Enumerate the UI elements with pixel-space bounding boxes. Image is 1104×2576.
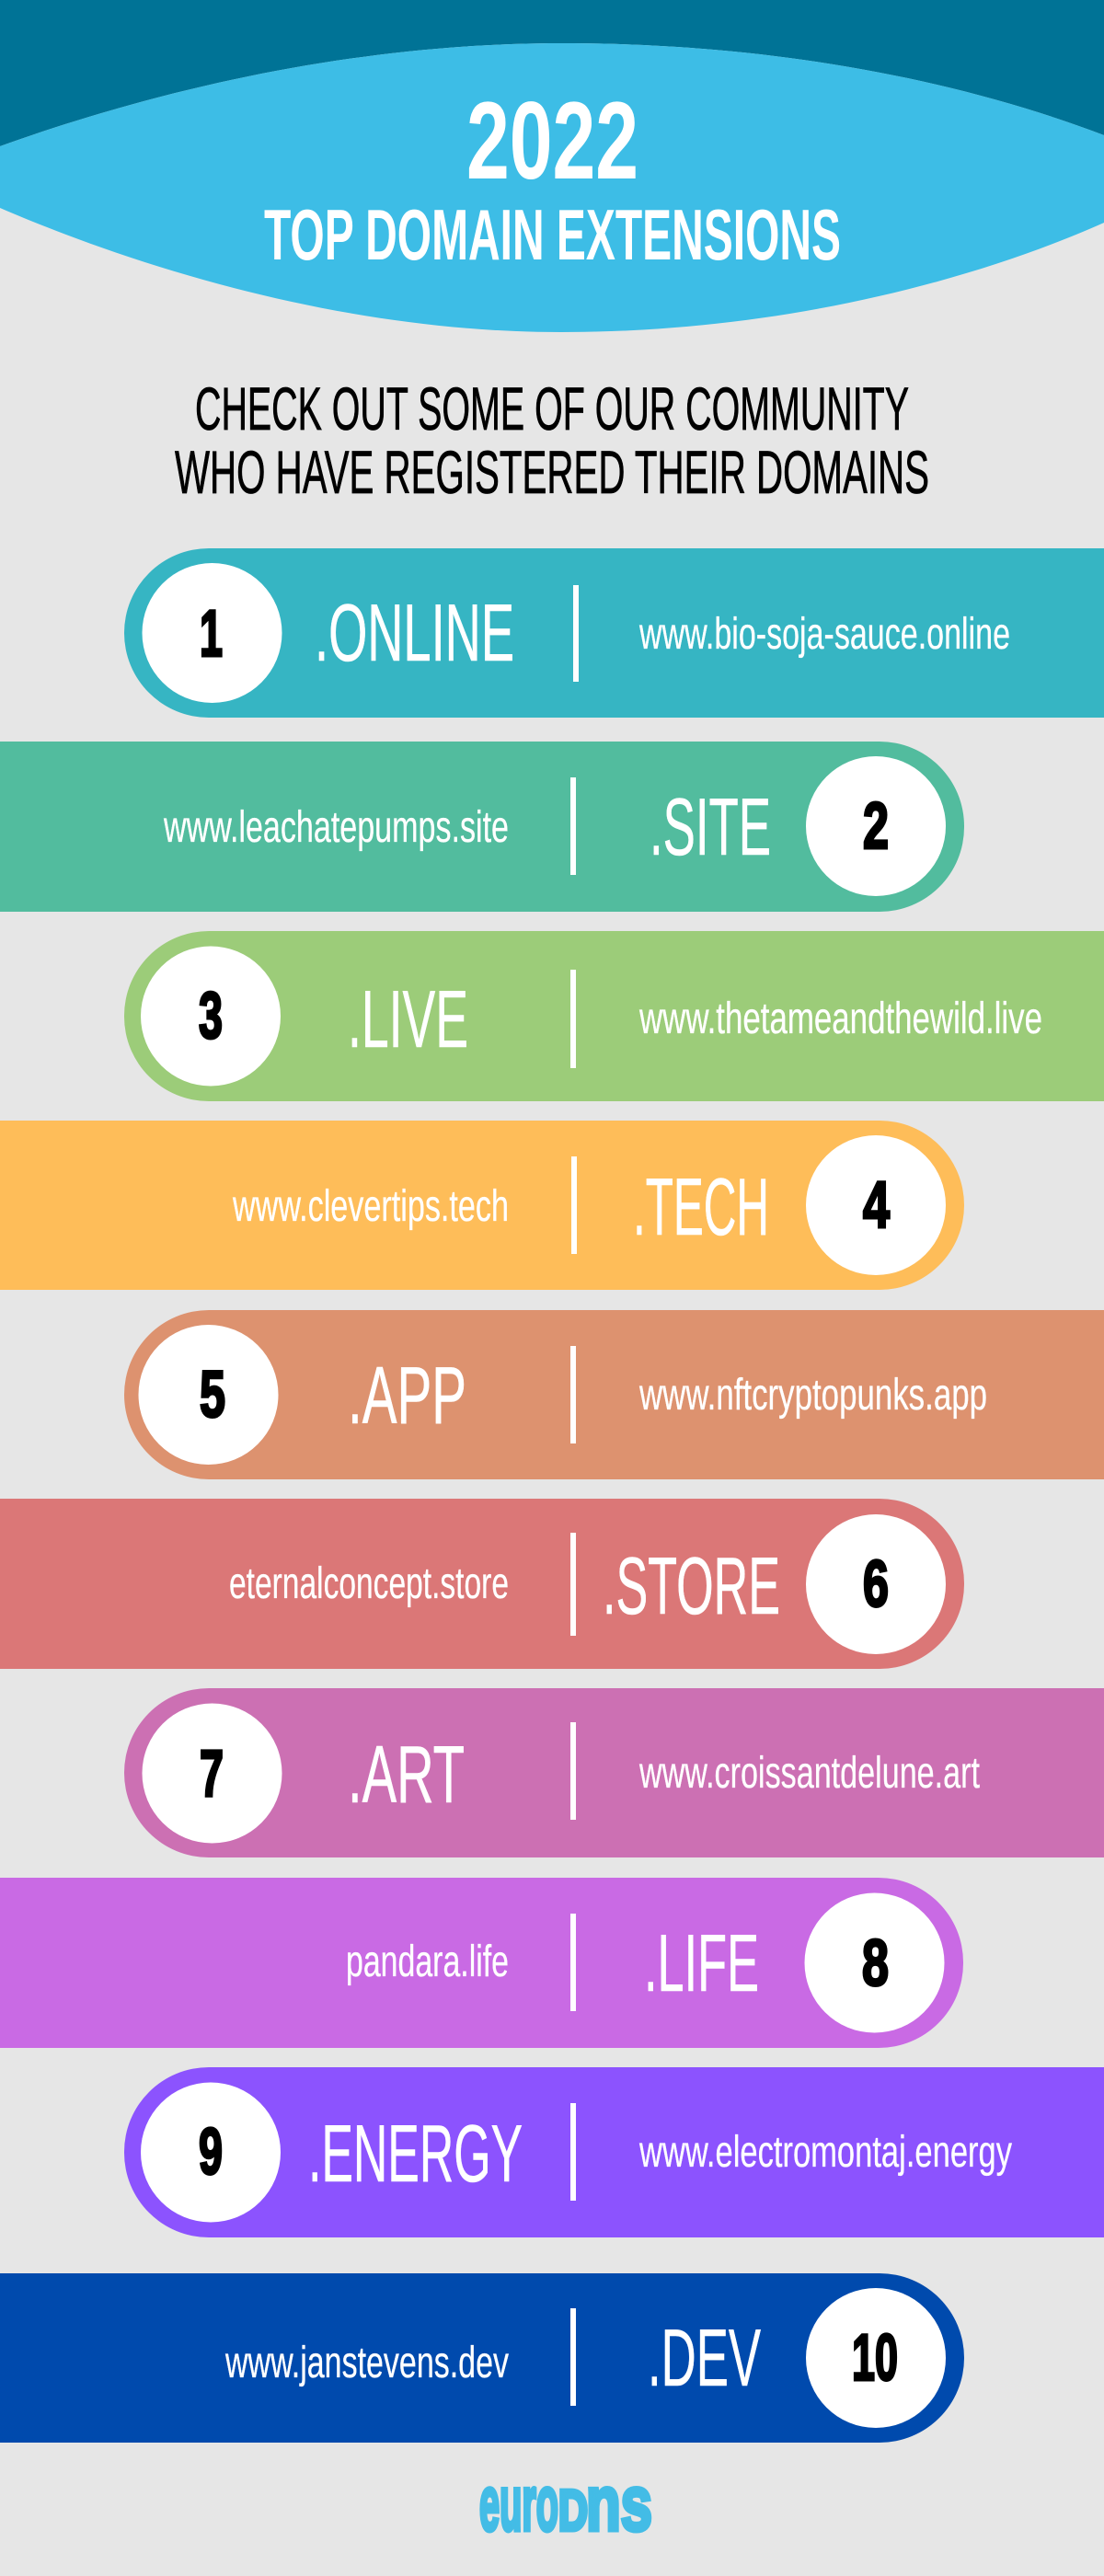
logo: eurodns: euro bbox=[479, 2460, 558, 2547]
subtitle bbox=[175, 374, 929, 506]
row 10: .dev: .DEV bbox=[648, 2312, 761, 2403]
logo: eurodns: ns bbox=[586, 2460, 652, 2547]
row 5: .app bbox=[124, 1310, 1104, 1479]
row 3: .live bbox=[124, 931, 1104, 1101]
row 6: .store: .STORE bbox=[603, 1540, 780, 1631]
row 7: .art bbox=[124, 1688, 1104, 1857]
row 7: .art: 7 bbox=[200, 1738, 224, 1811]
row 4: .tech: .TECH bbox=[633, 1161, 769, 1252]
row 6: .store: 6 bbox=[863, 1548, 889, 1621]
row 7: .art: www.croissantdelune.art bbox=[638, 1749, 980, 1798]
row 8: .life: .LIFE bbox=[644, 1917, 759, 2008]
row 10: .dev: 10 bbox=[852, 2322, 898, 2395]
row 2: .site bbox=[0, 742, 964, 912]
row 3: .live: 3 bbox=[199, 980, 223, 1052]
logo: eurodns: D bbox=[558, 2479, 588, 2543]
row 1: .online: .ONLINE bbox=[315, 587, 514, 678]
row 3: .live: .LIVE bbox=[348, 973, 468, 1064]
row 5: .app: .APP bbox=[348, 1350, 466, 1441]
row 2: .site: www.leachatepumps.site bbox=[163, 803, 509, 852]
row 1: .online: 1 bbox=[200, 598, 223, 671]
row 7: .art: .ART bbox=[348, 1729, 465, 1820]
row 9: .energy: 9 bbox=[199, 2116, 223, 2189]
row 2: .site: 2 bbox=[863, 790, 889, 863]
row 8: .life: 8 bbox=[862, 1927, 889, 2000]
row 4: .tech: www.clevertips.tech bbox=[232, 1182, 509, 1231]
row 6: .store bbox=[0, 1499, 964, 1669]
title year: 2022 bbox=[466, 79, 638, 202]
row 4: .tech bbox=[0, 1121, 964, 1290]
row 8: .life bbox=[0, 1878, 963, 2048]
header band bbox=[0, 0, 1104, 332]
row 9: .energy bbox=[124, 2067, 1104, 2237]
row 6: .store: eternalconcept.store bbox=[229, 1559, 509, 1608]
row 10: .dev bbox=[0, 2273, 964, 2443]
row 2: .site: .SITE bbox=[650, 781, 771, 872]
row 4: .tech: 4 bbox=[863, 1169, 890, 1242]
row 5: .app: 5 bbox=[200, 1359, 225, 1432]
row 8: .life: pandara.life bbox=[346, 1938, 509, 1986]
row 9: .energy: .ENERGY bbox=[308, 2108, 523, 2199]
row 1: .online bbox=[124, 548, 1104, 718]
row 10: .dev: www.janstevens.dev bbox=[224, 2339, 509, 2387]
row 5: .app: www.nftcryptopunks.app bbox=[638, 1371, 987, 1420]
